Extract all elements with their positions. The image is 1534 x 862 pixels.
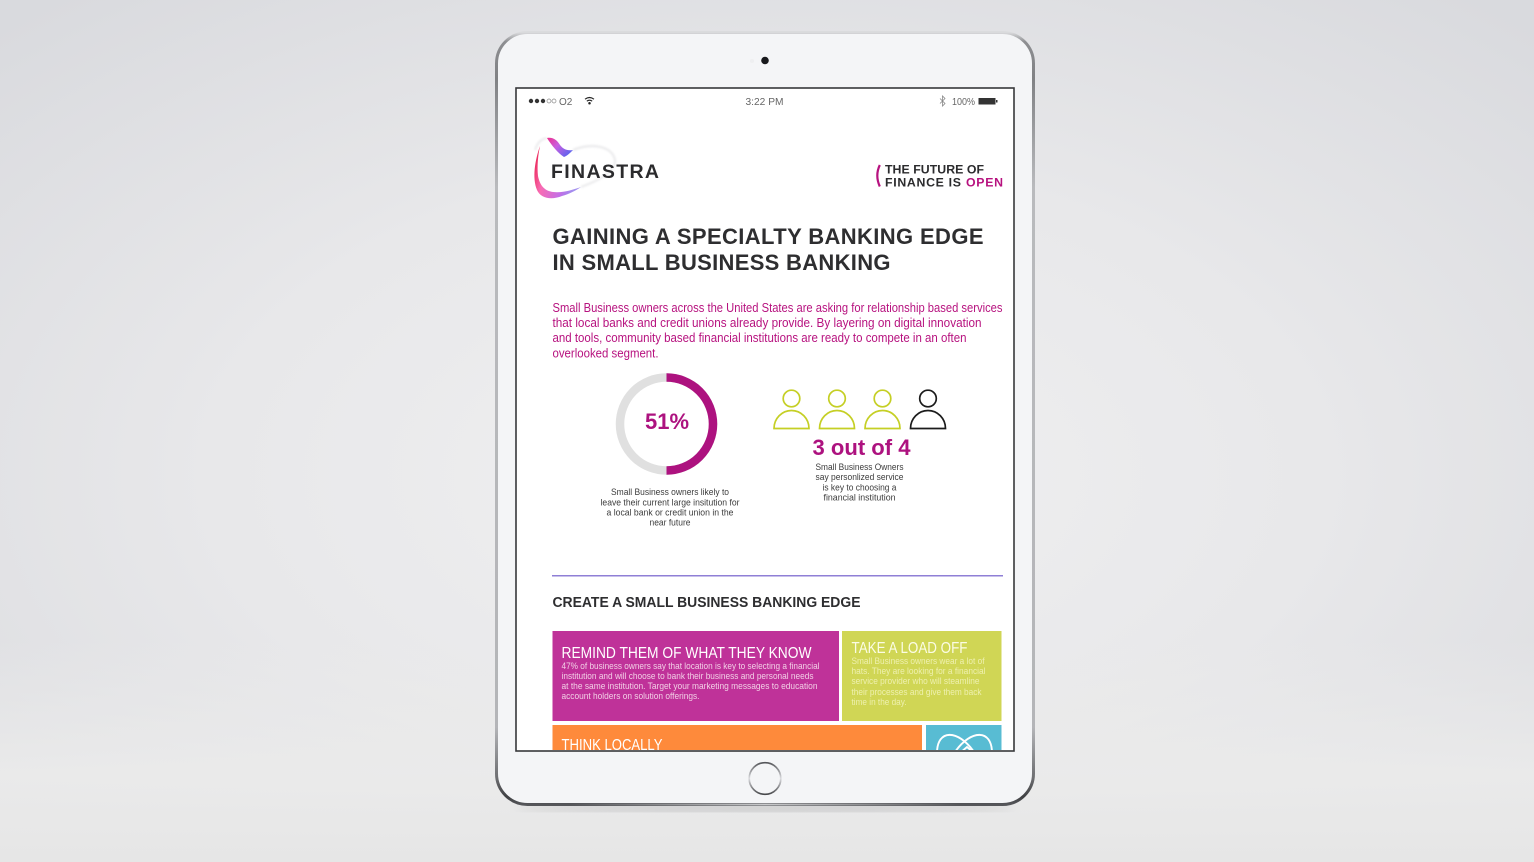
intro text: that local banks and credit unions already provide. By layering on digital innovation xyxy=(552,315,982,330)
title xyxy=(552,224,984,275)
signal dots and carrier xyxy=(529,97,573,108)
donut chart xyxy=(620,378,713,470)
stat: 3 out of 4 xyxy=(774,390,946,502)
intro text xyxy=(552,300,1003,360)
tiles xyxy=(552,631,1002,755)
stat value: 3 out of 4 xyxy=(812,435,911,460)
front camera xyxy=(750,57,769,64)
stat caption: is key to choosing a xyxy=(822,482,897,492)
panel: remind them: account holders on solution offerings. xyxy=(562,691,700,701)
icon: person 1 xyxy=(774,390,809,428)
stat caption: say personlized service xyxy=(816,472,904,482)
title: IN SMALL BUSINESS BANKING xyxy=(552,250,890,275)
device body xyxy=(496,32,1034,806)
stat caption xyxy=(816,462,904,502)
stat caption: financial institution xyxy=(824,492,896,502)
panel: teal icon tile xyxy=(926,725,1002,750)
panel: take a load off: hats. They are looking for a financial xyxy=(852,666,986,676)
icon: person 3 xyxy=(865,390,900,428)
panel: remind them: 47% of business owners say that location is key to selecting a financial xyxy=(562,661,820,671)
panel: take a load off: time in the day. xyxy=(852,697,906,707)
icon: heart and home xyxy=(937,735,992,753)
stat caption xyxy=(600,487,740,528)
panel: take a load off: their processes and give them back xyxy=(852,687,982,697)
icon: wifi xyxy=(585,98,594,104)
icon: person 4 xyxy=(910,390,946,428)
tagline: FINANCE IS xyxy=(885,176,961,190)
tagline xyxy=(877,162,1003,190)
panel: remind them: at the same institution. Target your marketing messages to education xyxy=(562,681,818,691)
stat caption: a local bank or credit union in the xyxy=(606,508,734,518)
icon: person 2 xyxy=(820,390,854,428)
signal dots and carrier: O2 xyxy=(559,97,573,108)
intro text: Small Business owners across the United States are asking for relationship based services xyxy=(552,300,1003,315)
intro text: and tools, community based financial institutions are ready to compete in an often xyxy=(552,330,966,345)
title: GAINING A SPECIALTY BANKING EDGE xyxy=(552,224,984,249)
panel: take a load off xyxy=(842,631,1002,721)
tagline: THE FUTURE OF xyxy=(885,162,984,176)
stat caption: leave their current large insitution for xyxy=(600,498,740,508)
panel: take a load off: TAKE A LOAD OFF xyxy=(852,640,968,657)
device shadow xyxy=(515,804,1015,812)
home button xyxy=(749,763,781,794)
panel: think locally xyxy=(552,725,922,750)
screen frame xyxy=(516,88,1014,751)
panel: remind them: institution and will choose to bank their business and personal needs xyxy=(562,671,814,681)
panel: remind them: REMIND THEM OF WHAT THEY KNOW xyxy=(562,645,812,662)
people icons xyxy=(774,390,946,428)
stat caption: near future xyxy=(650,518,691,528)
stat caption: Small Business Owners xyxy=(816,462,904,472)
panel: think locally: THINK LOCALLY xyxy=(562,737,662,754)
stat caption: Small Business owners likely to xyxy=(611,487,729,497)
panel: take a load off: service provider who will steamline xyxy=(852,676,980,686)
panel: remind them xyxy=(552,631,839,721)
icon: battery xyxy=(978,98,998,104)
logo swoosh xyxy=(534,138,615,198)
clock: 3:22 PM xyxy=(746,96,784,108)
wordmark: FINASTRA xyxy=(551,161,659,183)
stat value: 51% xyxy=(645,409,689,434)
section heading: CREATE A SMALL BUSINESS BANKING EDGE xyxy=(552,595,861,611)
tagline: OPEN xyxy=(966,176,1003,190)
logo: Finastra xyxy=(534,138,659,198)
status bar xyxy=(529,96,998,108)
icon: bluetooth xyxy=(940,96,945,106)
stat: 51 percent xyxy=(600,378,740,528)
bracket xyxy=(877,165,880,186)
tablet device xyxy=(496,32,1034,812)
intro text: overlooked segment. xyxy=(552,346,658,360)
battery level: 100% xyxy=(952,97,975,108)
panel: take a load off: Small Business owners wear a lot of xyxy=(852,656,985,666)
